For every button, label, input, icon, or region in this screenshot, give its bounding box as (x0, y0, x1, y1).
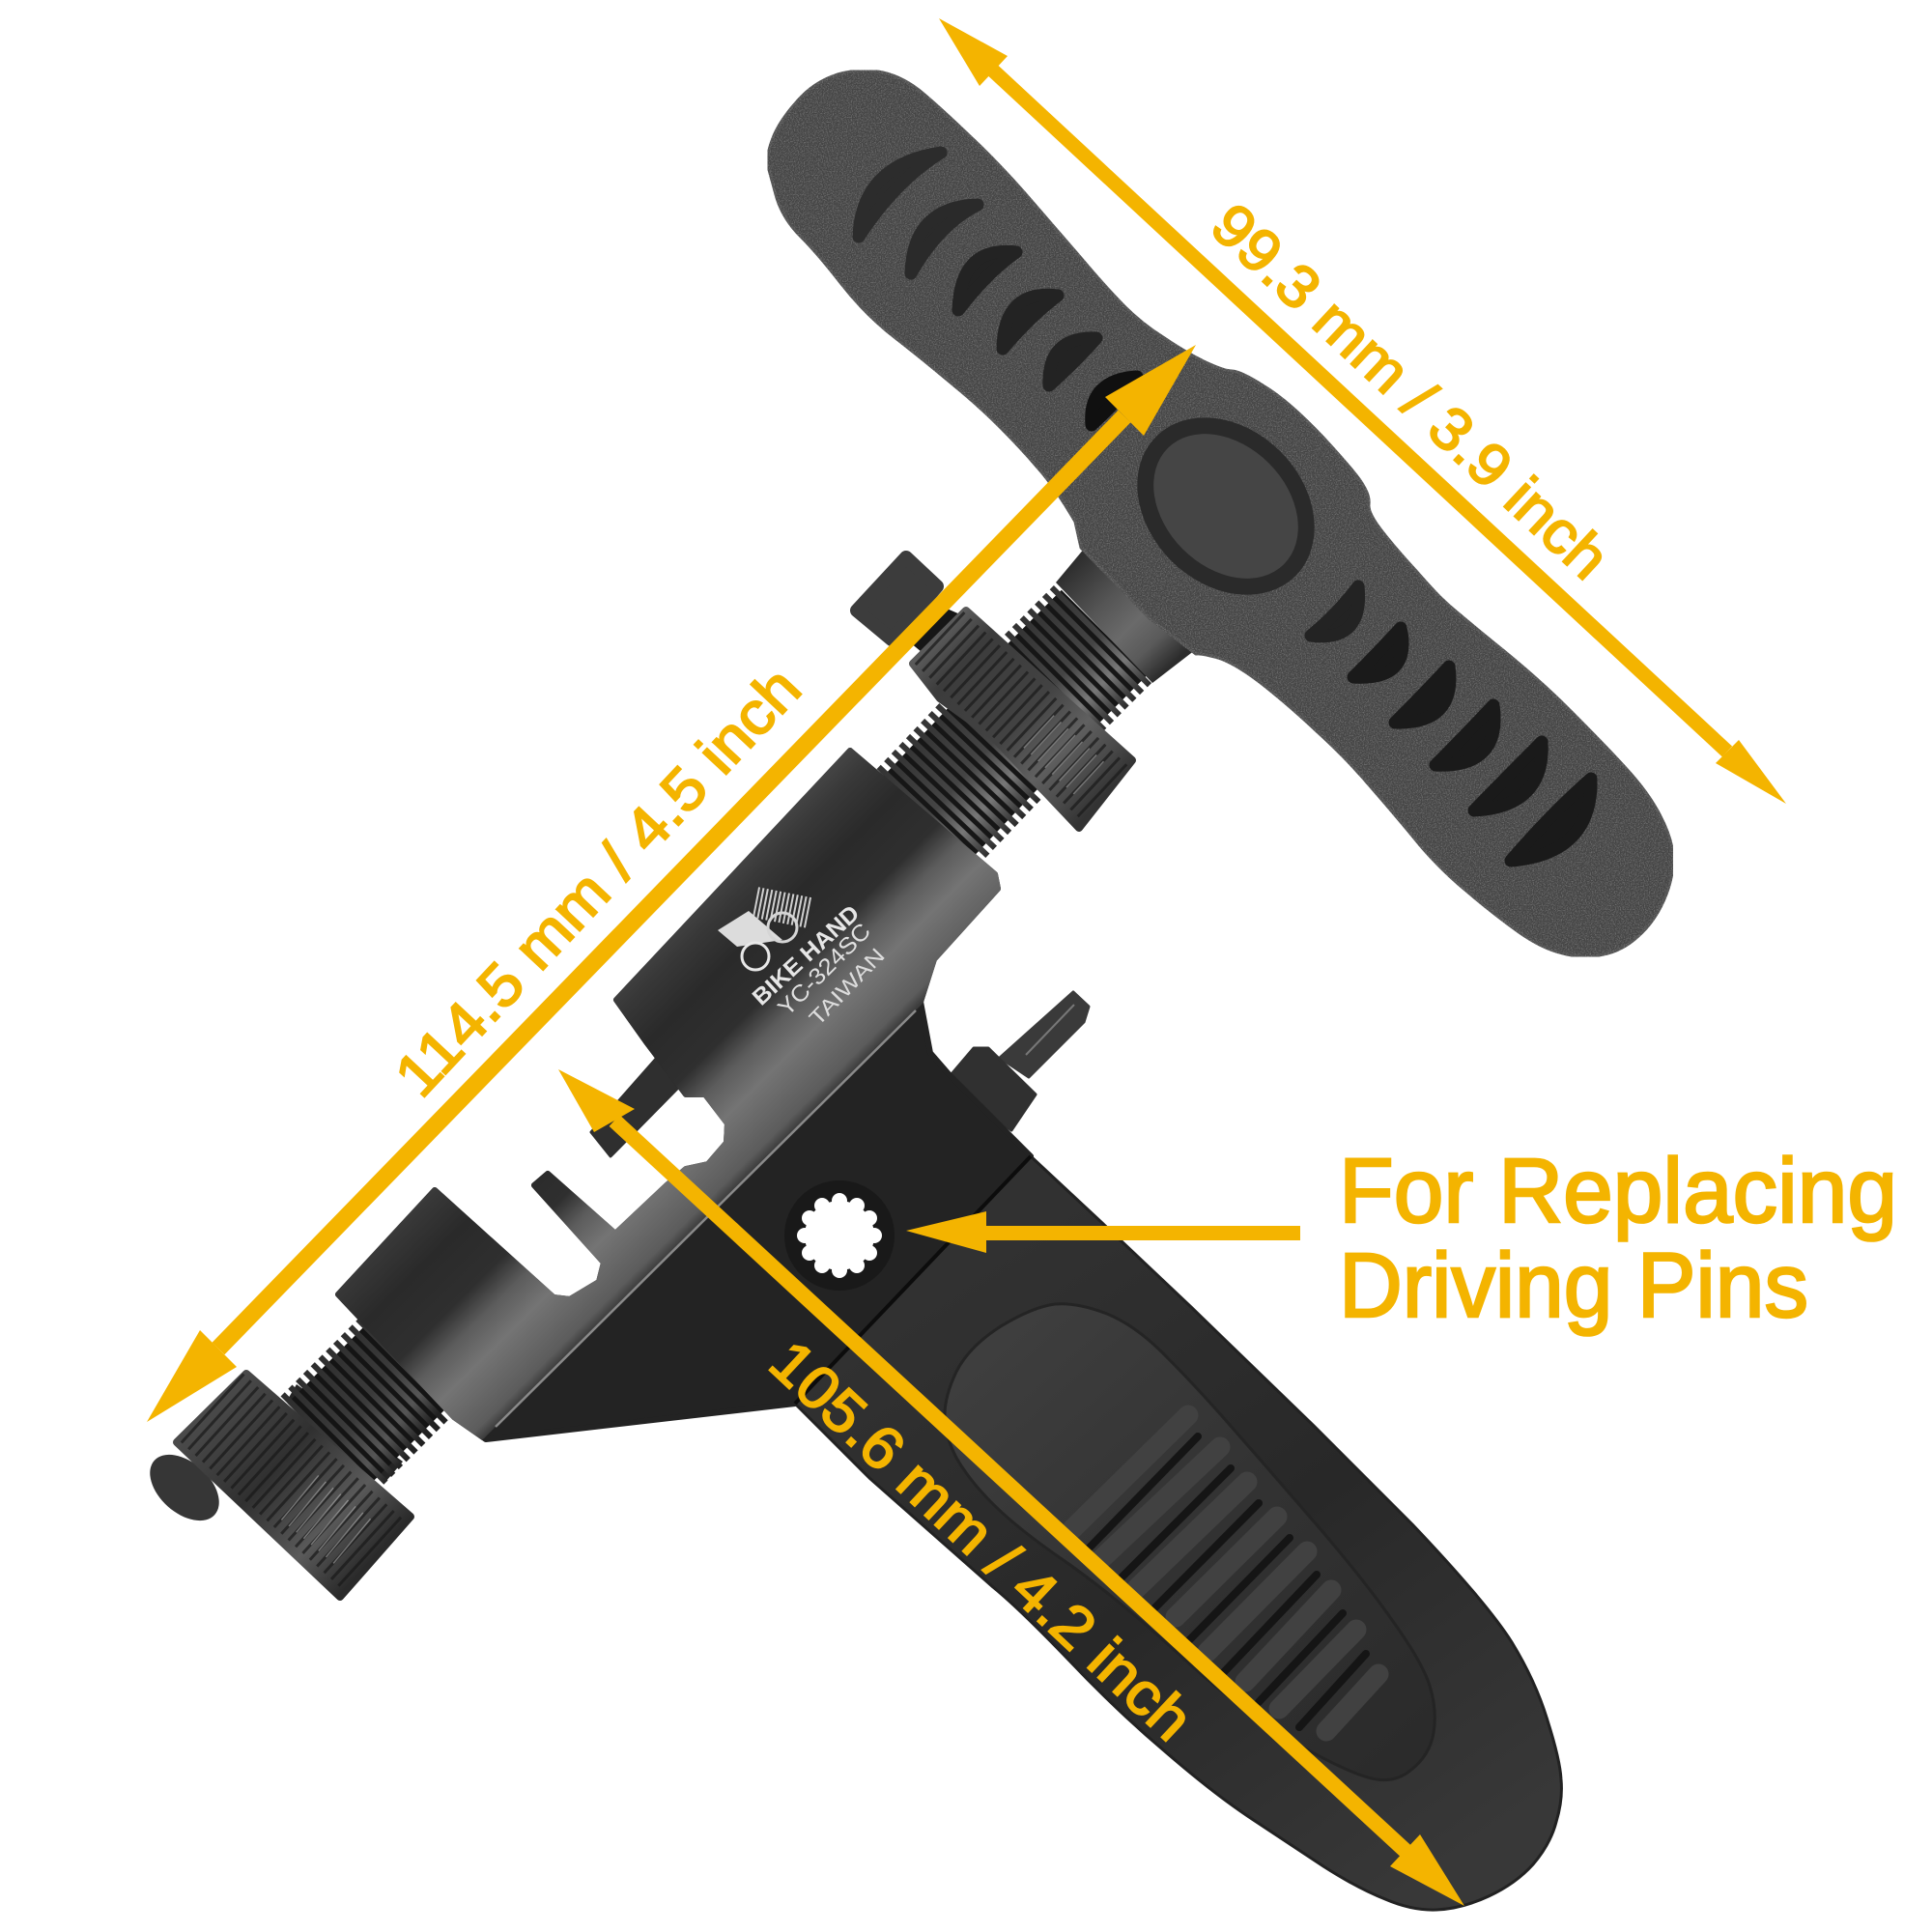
steel block shading above crease (338, 751, 1031, 1439)
engraved text: TAIWAN: TAIWAN (805, 943, 890, 1030)
grip ribs (1072, 1415, 1378, 1731)
end cap screw (137, 1442, 232, 1533)
T-handle rubber grip (768, 71, 1673, 956)
knurled lower nut (177, 1374, 411, 1597)
callout heading (1339, 1140, 1897, 1337)
grip groove shadows (1084, 1436, 1366, 1727)
threaded shaft upper section (1038, 633, 1104, 698)
spare driving pin with nut (952, 992, 1089, 1130)
grip raised pad (945, 1304, 1435, 1780)
label: body length: 105.6 mm / 4.2 inch (756, 1328, 1206, 1753)
label: handle width: 99.3 mm / 3.9 inch (1198, 191, 1622, 592)
callout heading: Driving Pins (1339, 1235, 1808, 1337)
label: overall length: 114.5 mm / 4.5 inch (383, 655, 814, 1110)
arrow: body length (558, 1069, 1464, 1906)
splined hole for driving pins (784, 1180, 895, 1291)
threaded shaft lower section (287, 1348, 425, 1481)
threaded shaft middle section (913, 736, 1005, 833)
steel body plate (338, 751, 1031, 1439)
ejector pin left of upper block (591, 1058, 679, 1156)
arrow: overall length (147, 345, 1196, 1422)
engraved text: YC-324SC: YC-324SC (773, 918, 876, 1021)
seam between body and grip (795, 1156, 1031, 1404)
knurled upper nut (913, 611, 1132, 828)
handle hub ring (1101, 382, 1350, 631)
handle grip holes (859, 153, 1591, 861)
arrow: pointer to hole (906, 1211, 1300, 1253)
lower grip handle (795, 1156, 1561, 1910)
illustration: bicycle chain tool (137, 71, 1673, 1910)
callout heading: For Replacing (1339, 1140, 1897, 1242)
set screw knob (857, 557, 969, 657)
threaded collar (1056, 548, 1195, 683)
arrow: handle width (939, 18, 1786, 804)
engraved text: BIKE HAND: BIKE HAND (748, 900, 865, 1010)
brand logo engraving (718, 902, 810, 970)
